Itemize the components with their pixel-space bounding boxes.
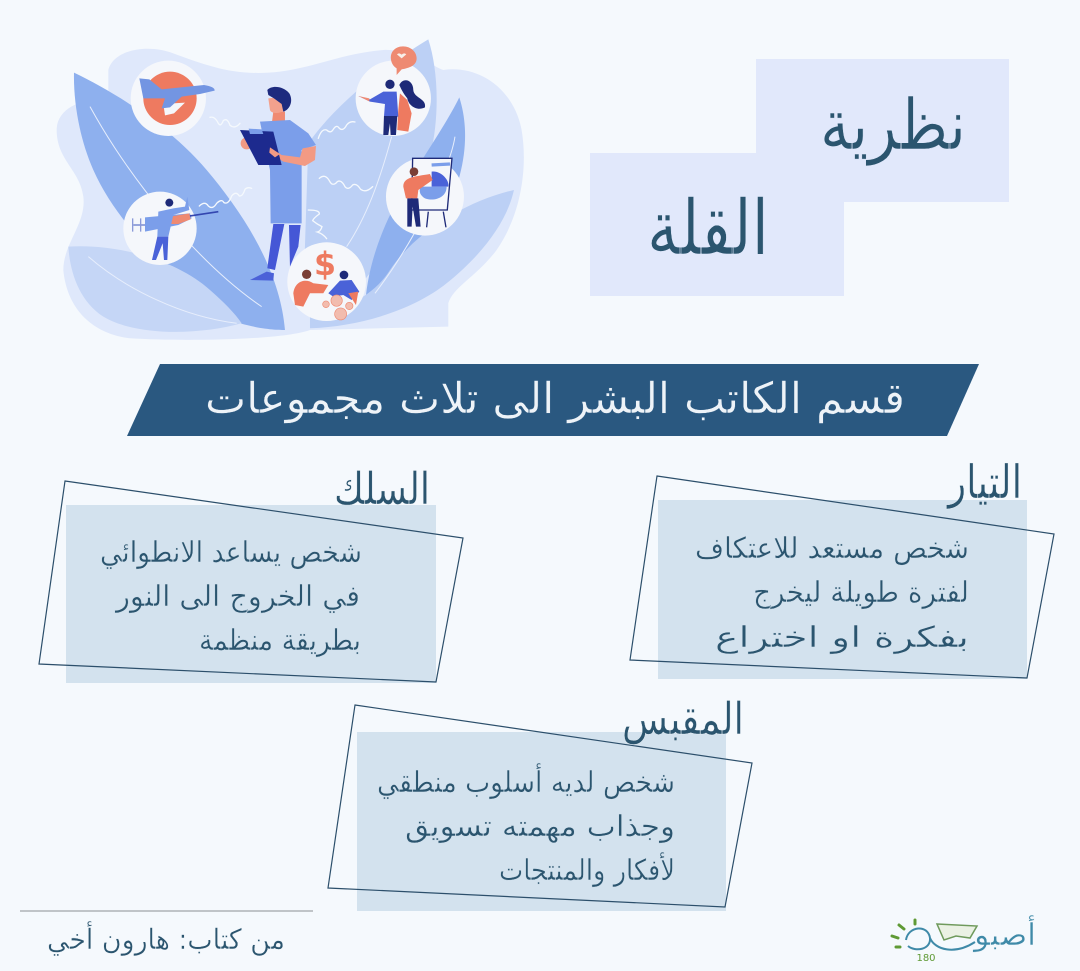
card text (100, 535, 362, 657)
illustration: analyst with four circles of people (57, 39, 524, 340)
leaf: left large (74, 73, 285, 330)
circle: plane and globe (131, 61, 215, 136)
footer: book source: من كتاب: هارون أخي (47, 920, 285, 956)
panel: title block nazariya (756, 59, 1009, 202)
banner text: قسم الكاتب البشر الى تلاث مجموعات (205, 374, 905, 424)
card text: بفكرة او اختراع (715, 620, 969, 654)
card text: بطريقة منظمة (199, 623, 361, 657)
card text: لفترة طويلة ليخرج (753, 575, 969, 610)
logo sun rays (892, 920, 915, 947)
leaf: lower right (310, 190, 514, 328)
logo script stroke (906, 928, 975, 950)
leaf: right narrow (365, 97, 465, 308)
card text: لأفكار والمنتجات (499, 851, 675, 887)
leaf: bottom left (68, 246, 242, 332)
card heading: المقبس (622, 694, 744, 745)
card text: في الخروج الى النور (114, 579, 360, 614)
logo: Osbooha 180 (892, 914, 1036, 964)
card text: وجذاب مهمته تسويق (405, 809, 675, 843)
card text: شخص مستعد للاعتكاف (695, 531, 969, 565)
card text (695, 531, 969, 654)
figure: central man with clipboard (240, 87, 316, 281)
card: wire (al-silk) (39, 464, 463, 683)
card text: شخص لديه أسلوب منطقي (377, 762, 675, 800)
logo wordmark: أصبو (972, 914, 1036, 953)
card: current (al-tayyar) (630, 455, 1054, 679)
circle: man with syringe (123, 192, 218, 265)
card heading: السلك (334, 464, 430, 515)
banner: groups heading (127, 364, 979, 436)
circle: handshake and money: $ (314, 247, 336, 283)
panel: title block qilla (590, 153, 844, 296)
card text: شخص يساعد الانطوائي (100, 535, 362, 570)
title word 2: القلة (647, 183, 769, 272)
card: plug (al-miqbas) (328, 694, 752, 911)
logo bridge (937, 924, 977, 940)
circle: handshake and money (287, 242, 366, 321)
logo number: 180 (916, 953, 936, 964)
background blobs (57, 49, 524, 340)
circle: presenter with pie chart (386, 158, 464, 236)
leaf veins (88, 107, 455, 323)
circle: couple with heart bubble (356, 46, 431, 136)
card text (377, 762, 675, 887)
squiggle connectors (199, 117, 373, 239)
leaf: upper right (303, 39, 437, 298)
title word 1: نظرية (820, 84, 966, 166)
card heading: التيار (946, 455, 1022, 509)
